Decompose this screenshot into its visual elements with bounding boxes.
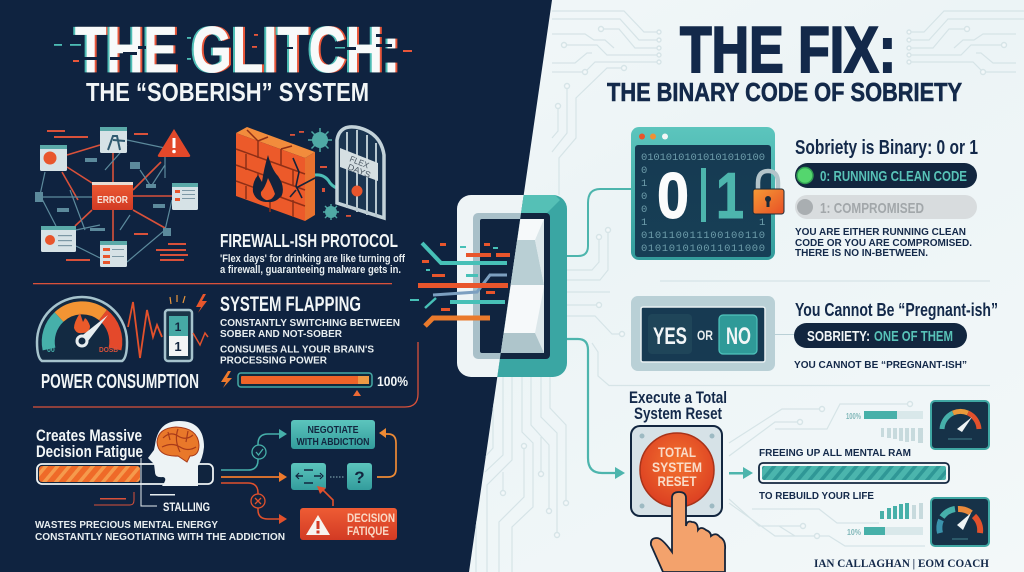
- icon: left window: [40, 145, 67, 171]
- box: decision fatigue: DECISION: [347, 513, 395, 525]
- icon: virus bottom: [323, 204, 339, 220]
- icon: lower left window: [41, 226, 76, 252]
- icon: reset button: [631, 426, 722, 516]
- panel: yes or no: YES: [653, 323, 687, 350]
- panel: binary code window: 1: [759, 217, 765, 229]
- box: negotiate with addiction: NEGOTIATE: [308, 424, 358, 436]
- icon: flex days gate: FLEX: [348, 154, 371, 170]
- icon: top right gauge: [931, 401, 989, 449]
- icon: error box: ERROR: [97, 195, 129, 206]
- chart: 100% mini bar: 100%: [846, 412, 861, 421]
- icon: power gauge: [37, 297, 127, 361]
- text: wastes precious mental energy: CONSTANTLY NEGOTIATING WITH THE ADDICTION: [35, 532, 285, 543]
- arrow: orange to loop: [221, 472, 287, 482]
- icon: right window: [172, 183, 198, 210]
- chart: rising level bars: [880, 503, 923, 519]
- pill: sobriety one of them: SOBRIETY:: [807, 328, 870, 345]
- text: firewall description: a firewall, guaranteeing malware gets in.: [220, 264, 401, 276]
- background: dark side: [0, 0, 552, 572]
- box: negotiate with addiction: WITH ABDICTION: [296, 436, 370, 448]
- text: binary explanation: [795, 227, 972, 259]
- chart: 100% mini bar: [846, 411, 923, 421]
- box: decision fatigue: [300, 508, 397, 540]
- pill: compromised: [795, 195, 977, 219]
- icon: bottom window: [100, 241, 127, 267]
- icon: flex days gate: DAYS: [346, 162, 373, 180]
- title: THE GLITCH: THE GLITCH:: [73, 13, 398, 86]
- box: question mark: [347, 463, 372, 490]
- text: binary explanation: YOU ARE EITHER RUNNING CLEAN: [795, 227, 966, 238]
- subtitle: binary code of sobriety: THE BINARY CODE OF SOBRIETY: [607, 77, 962, 107]
- chart: faded level bars: [881, 428, 923, 443]
- heading: creates massive decision fatigue: Decision Fatigue: [36, 443, 143, 461]
- text: wastes precious mental energy: [35, 520, 285, 543]
- box: question mark: ?: [354, 468, 365, 487]
- icon: padlock: [753, 171, 784, 214]
- panel: binary code window: [631, 127, 784, 260]
- panel: error network: [35, 127, 198, 267]
- heading: firewall-ish protocol: FIREWALL-ISH PROTOCOL: [220, 231, 398, 251]
- box: decision fatigue: FATIQUE: [347, 526, 389, 538]
- panel: yes or no: OR: [697, 327, 713, 343]
- arrow: red to decision fatigue: [221, 483, 287, 524]
- icon: reset button: SYSTEM: [652, 459, 702, 475]
- panel: binary code window: 0: [641, 204, 647, 216]
- text: system flapping description: CONSTANTLY SWITCHING BETWEEN: [220, 318, 400, 329]
- icon: power gauge: 00: [47, 347, 55, 354]
- icon: bottom right gauge: [931, 498, 989, 546]
- heading: power consumption: POWER CONSUMPTION: [41, 371, 199, 393]
- heading: creates massive decision fatigue: Creates Massive: [36, 427, 142, 445]
- text: pregnant-ish caption: YOU CANNOT BE “PREGNANT-ISH”: [794, 360, 967, 371]
- text: binary explanation: CODE OR YOU ARE COMPROMISED.: [795, 238, 972, 249]
- heading: execute a total system reset: Execute a Total: [629, 389, 727, 407]
- heading: sobriety is binary: Sobriety is Binary: 0 or 1: [795, 137, 978, 159]
- panel: binary code window: 010110011100100110: [641, 230, 765, 242]
- chart: power bar at 100%: 100%: [377, 374, 408, 389]
- pill: sobriety one of them: ONE OF THEM: [874, 328, 953, 345]
- icon: virus top: [308, 128, 332, 152]
- icon: pressing hand: [651, 492, 725, 572]
- connector: lower divider into switch: [33, 342, 418, 407]
- icon: top window: [100, 127, 127, 153]
- heading: creates massive decision fatigue: [36, 427, 143, 461]
- arrow: fatigue to loop: [317, 486, 333, 506]
- panel: binary code window: 01010101010101010100: [641, 152, 765, 164]
- chart: stalling progress bar: [37, 464, 213, 484]
- icon: toggle switch: [165, 310, 192, 361]
- pill: running clean code: 0: RUNNING CLEAN CODE: [820, 168, 967, 185]
- pill: running clean code: [795, 163, 977, 188]
- divider: upper: [33, 283, 392, 284]
- pill: sobriety one of them: [794, 323, 967, 348]
- glitch streaks: into switch: [410, 243, 510, 326]
- arrow: button to ram bar: [729, 467, 753, 479]
- text: to rebuild your life: TO REBUILD YOUR LIFE: [759, 490, 874, 502]
- label: stalling: STALLING: [163, 502, 210, 514]
- icon: heartbeat line: [128, 302, 162, 358]
- text: firewall description: 'Flex days' for drinking are like turning off: [220, 253, 405, 265]
- icon: error box: [92, 182, 133, 210]
- switch: teal half: [497, 195, 567, 377]
- heading: execute a total system reset: System Reset: [634, 405, 722, 423]
- icon: head with brain: [148, 421, 204, 486]
- panel: binary code window: 1: [716, 159, 744, 232]
- credit: author: IAN CALLAGHAN | EOM COACH: [814, 556, 990, 570]
- text: freeing up all mental ram: FREEING UP ALL MENTAL RAM: [759, 447, 911, 459]
- panel: yes or no: NO: [726, 323, 751, 350]
- title: THE GLITCH: THE GLITCH:: [75, 13, 400, 86]
- title: THE FIX: THE FIX:: [680, 13, 896, 86]
- chart: 10% mini bar: 10%: [847, 528, 861, 537]
- connector: switch to reset button: [567, 339, 625, 479]
- icon: reset button: TOTAL: [658, 444, 696, 460]
- text: system flapping description: CONSUMES ALL YOUR BRAIN'S: [220, 344, 374, 356]
- text: system flapping description: [220, 318, 400, 366]
- panel: binary code window: 1: [641, 178, 647, 190]
- icon: flame: [253, 155, 283, 202]
- panel: binary code window: 010101010011011000: [641, 243, 765, 255]
- label: stalling: [94, 458, 210, 514]
- text: system flapping description: SOBER AND NOT-SOBER: [220, 329, 343, 340]
- box: negotiate with addiction: [291, 420, 375, 449]
- chart: power bar at 100%: [221, 371, 408, 396]
- chart: ram bar: [759, 463, 949, 483]
- text: system flapping description: PROCESSING POWER: [220, 356, 328, 366]
- heading: execute a total system reset: [629, 389, 727, 423]
- icon: toggle switch: 1: [174, 339, 182, 354]
- icon: warning triangle: [158, 129, 190, 157]
- icon: toggle switch: 1: [175, 320, 182, 334]
- subtitle: the soberish system: THE “SOBERISH” SYSTEM: [86, 77, 369, 107]
- panel: yes or no: [631, 296, 775, 371]
- panel: binary code window: 0: [657, 159, 689, 232]
- text: wastes precious mental energy: WASTES PRECIOUS MENTAL ENERGY: [35, 520, 218, 531]
- connector: switch to binary window: [567, 189, 631, 256]
- pill: compromised: 1: COMPROMISED: [820, 200, 924, 217]
- icon: power gauge: DOSB: [99, 347, 118, 354]
- icon: firewall with gate: [236, 127, 384, 221]
- icon: lightning and sparks: [170, 294, 208, 345]
- icon: loop box: [291, 463, 326, 490]
- arrow: teal to negotiate: [221, 429, 287, 470]
- panel: binary code window: 0: [641, 165, 647, 177]
- connector: yes/no to pill: [775, 334, 795, 335]
- heading: system flapping: SYSTEM FLAPPING: [220, 293, 361, 316]
- icon: reset button: RESET: [658, 473, 697, 489]
- icon: flex days gate: [337, 127, 384, 218]
- dotted link: [330, 476, 344, 478]
- panel: binary code window: 1: [641, 217, 647, 229]
- arrow: loop back to negotiate: [377, 428, 396, 477]
- switch: central toggle: [457, 195, 567, 377]
- text: binary explanation: THERE IS NO IN-BETWEEN.: [795, 248, 928, 259]
- text: firewall description: [220, 253, 405, 276]
- title: THE GLITCH: THE GLITCH:: [77, 13, 402, 86]
- chart: 10% mini bar: [847, 527, 923, 537]
- switch: light half: [457, 195, 524, 377]
- panel: binary code window: 0: [641, 191, 647, 203]
